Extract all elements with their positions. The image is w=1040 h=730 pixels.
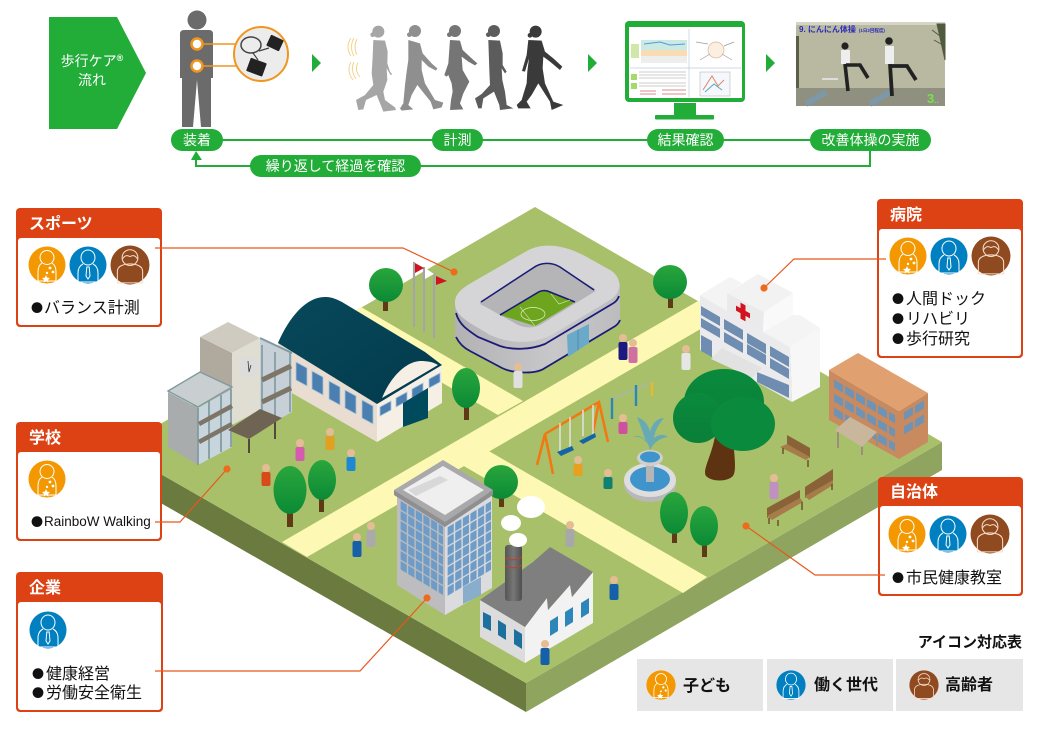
- panel: 自治体: ●: [892, 569, 904, 586]
- label: 結果確認: [647, 129, 724, 151]
- panel: 病院: 歩行研究: [906, 330, 970, 348]
- flow chevron: 歩行ケア 流れ: ®: [117, 53, 124, 63]
- people: [262, 334, 778, 665]
- road: north-east to south-west: [282, 301, 723, 557]
- flow chevron: 歩行ケア 流れ: [49, 17, 146, 129]
- legend: 高齢者: 高齢者: [945, 675, 993, 694]
- panel: スポーツ: [16, 208, 162, 327]
- brick building: [829, 353, 928, 459]
- arrow 3: [766, 54, 775, 72]
- callout line: スポーツ: [155, 248, 458, 276]
- panel: 企業: 労働安全衛生: [46, 684, 142, 702]
- horizontal bars: [612, 382, 652, 419]
- exercise video still: 9. にんにん体操 (1日2回程度): [799, 24, 885, 34]
- gymnasium: [278, 297, 442, 442]
- panel: 自治体: 市民健康教室: [906, 569, 1002, 587]
- panel: 病院: リハビリ: [906, 310, 970, 328]
- panel: 企業: 健康経営: [46, 665, 110, 683]
- smoke: [501, 496, 545, 547]
- panel: 自治体: [878, 477, 1023, 596]
- panel: スポーツ: スポーツ: [29, 215, 93, 233]
- monitor with results report: [625, 21, 745, 120]
- flags: [414, 262, 447, 338]
- benches: [767, 435, 833, 526]
- legend: 子ども: [637, 659, 763, 711]
- exercise video still: [796, 22, 945, 106]
- flow chevron: 歩行ケア 流れ: 歩行ケア: [61, 53, 117, 69]
- office building: [394, 460, 493, 615]
- legend: 子ども: 子ども: [683, 677, 731, 695]
- big tree: [673, 369, 775, 480]
- school: [168, 322, 292, 465]
- label: 改善体操の実施: [810, 129, 931, 151]
- legend: 高齢者: [896, 659, 1023, 711]
- panel: 病院: ●: [892, 290, 904, 307]
- panel: 自治体: 自治体: [890, 482, 938, 501]
- label: 改善体操の実施: 改善体操の実施: [822, 132, 920, 148]
- panel: 学校: [16, 422, 162, 541]
- label: 計測: [432, 129, 483, 151]
- panel: 病院: ●: [892, 330, 904, 347]
- exercise video still: 3..: [927, 91, 939, 106]
- isometric town board: [117, 207, 942, 712]
- walker 2: [400, 25, 443, 111]
- walker 5: [517, 26, 563, 110]
- callout line: 学校: [155, 465, 231, 522]
- factory: [480, 545, 593, 663]
- label: 繰り返して経過を確認: [250, 155, 421, 177]
- arrow 2: [588, 54, 597, 72]
- icon: sensor devices: [234, 27, 288, 81]
- label: 結果確認: 結果確認: [658, 132, 714, 148]
- panel: 学校: ●RainboW Walking: [31, 513, 151, 530]
- connector lines of flow: [196, 140, 870, 166]
- flow chevron: 歩行ケア 流れ: 流れ: [78, 72, 106, 88]
- legend: 働く世代: [767, 659, 893, 711]
- panel: 病院: 病院: [890, 206, 922, 224]
- panel: 病院: ●: [892, 310, 904, 327]
- walker 4: [475, 25, 513, 110]
- callout line: 自治体: [742, 522, 885, 575]
- panel: 企業: ●: [32, 665, 44, 682]
- callout line: 病院: [760, 259, 886, 292]
- fountain: [624, 417, 676, 502]
- label: 繰り返して経過を確認: 繰り返して経過を確認: [266, 158, 405, 174]
- panel: 企業: [16, 572, 163, 712]
- legend title: アイコン対応表: [918, 633, 1022, 651]
- road: north-west: [337, 307, 523, 415]
- swing set: [537, 402, 608, 474]
- legend: 働く世代: 働く世代: [814, 676, 878, 694]
- walker 1: [356, 26, 396, 112]
- trees: [274, 265, 718, 557]
- icon: sound wave rings: [348, 38, 360, 80]
- hospital: [700, 274, 820, 402]
- label: 計測: 計測: [444, 132, 472, 148]
- walking silhouettes: [356, 25, 563, 112]
- callout line: 企業: [155, 594, 431, 671]
- panel: 企業: 企業: [29, 578, 61, 597]
- walker 3: [444, 25, 477, 110]
- icon: person wearing sensors: [180, 10, 236, 127]
- panel: 学校: 学校: [29, 428, 61, 447]
- panel: スポーツ: バランス計測: [44, 299, 140, 317]
- label: 装着: [171, 129, 223, 151]
- loop arrow head: [191, 151, 202, 160]
- arrow 1: [312, 54, 321, 72]
- stadium: [455, 246, 620, 373]
- label: 装着: 装着: [183, 132, 211, 148]
- panel: 病院: [877, 199, 1023, 358]
- panel: スポーツ: ●: [31, 299, 43, 316]
- road: south-east: [462, 450, 707, 593]
- panel: 企業: ●: [32, 684, 44, 701]
- panel: 病院: 人間ドック: [906, 290, 986, 308]
